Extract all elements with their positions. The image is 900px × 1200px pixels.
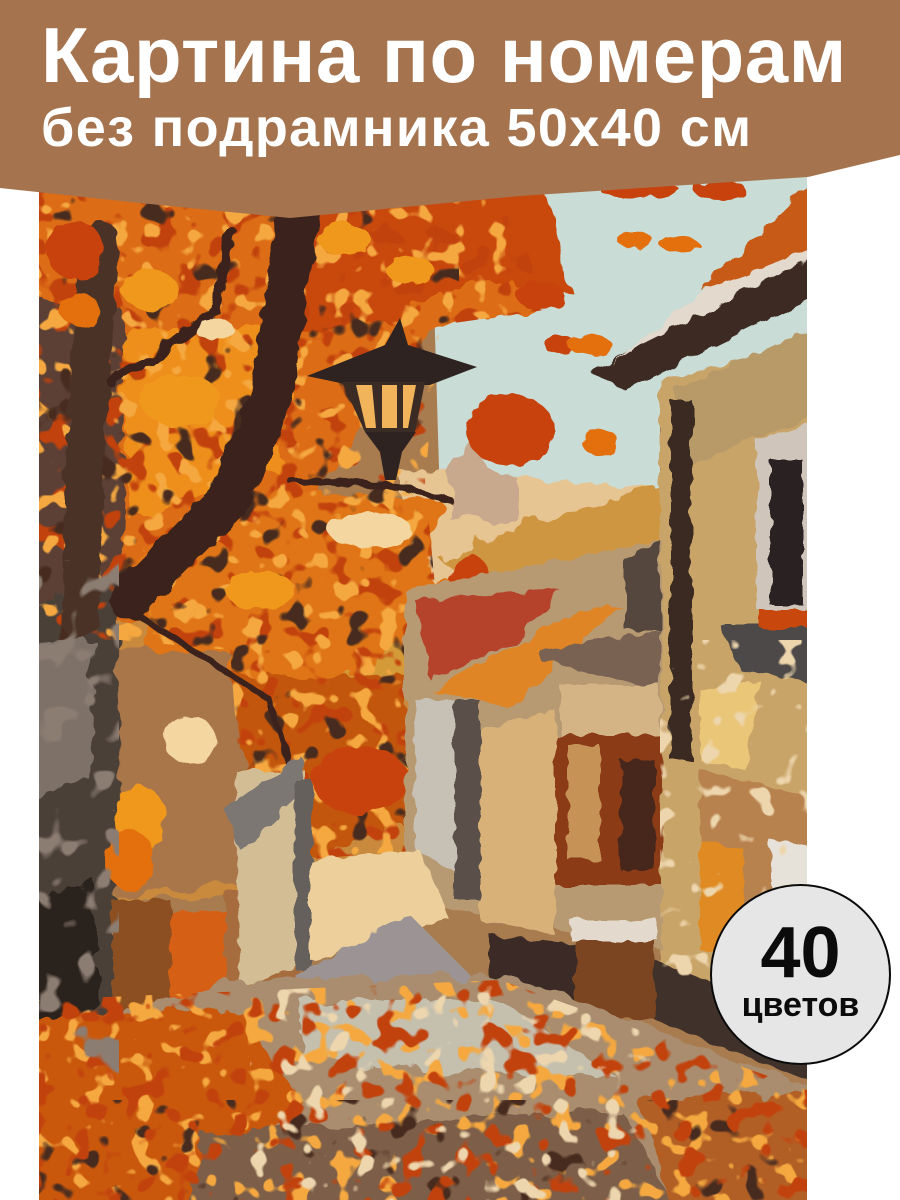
sky [434, 177, 807, 490]
mid street houses [405, 540, 662, 950]
icon: street lantern [307, 318, 477, 480]
badge: 40 colours [710, 884, 891, 1065]
orange leaf clusters [47, 180, 746, 890]
banner background [0, 0, 900, 218]
badge: 40 colours: 40 [760, 913, 841, 993]
road texture [39, 980, 807, 1200]
right building [590, 188, 807, 982]
left tree mass and background foliage [39, 192, 574, 1020]
tree trunk and branches [80, 210, 450, 800]
building texture [660, 640, 807, 980]
left trunk texture [39, 560, 119, 1080]
gate and alley [112, 755, 830, 1090]
subtitle: без подрамника 50х40 см [41, 98, 752, 158]
badge: 40 colours: цветов [742, 986, 859, 1024]
mottled foliage texture [39, 192, 544, 859]
background hills and haze [100, 440, 680, 900]
underpainting [111, 328, 807, 1086]
title: Картина по номерам [41, 11, 847, 99]
cobbled road with fallen leaves [10, 975, 830, 1200]
